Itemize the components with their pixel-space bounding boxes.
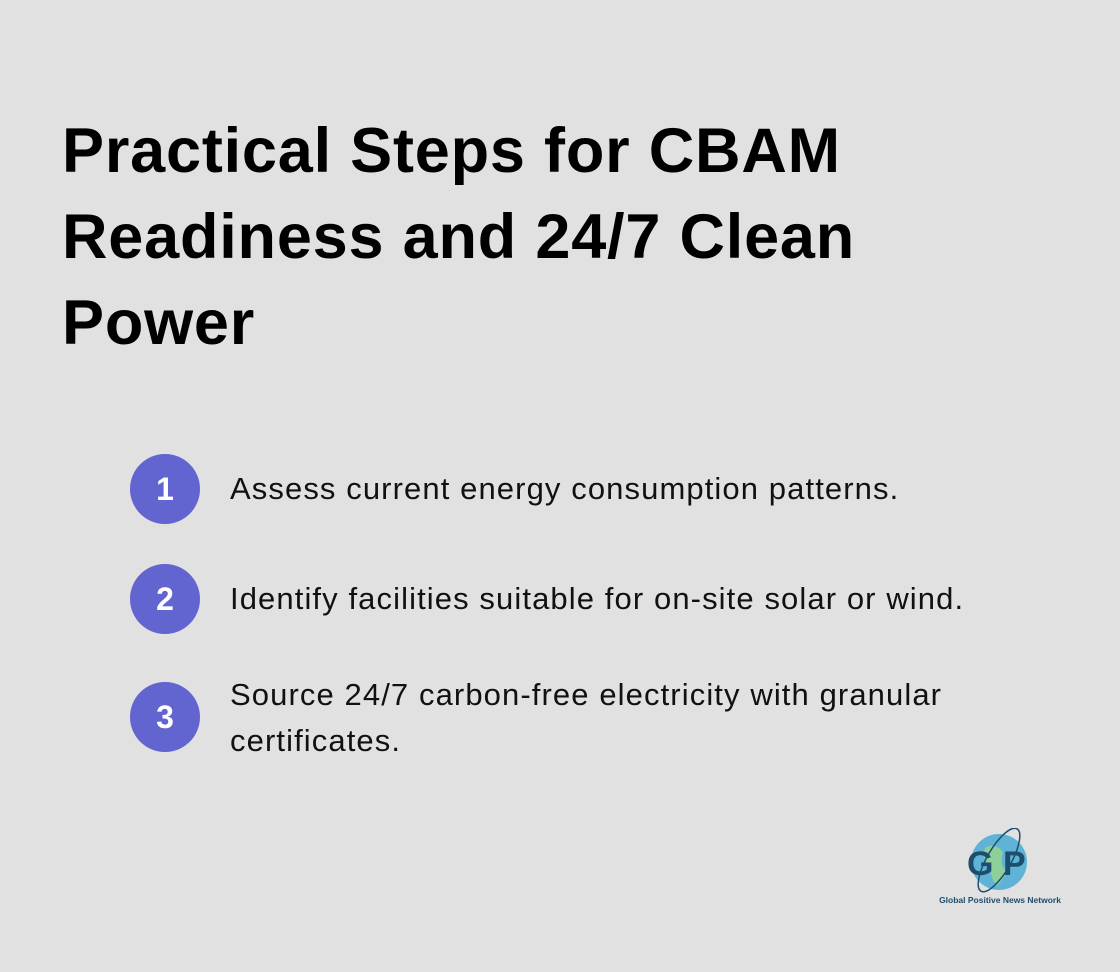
logo: Global Positive News Network xyxy=(939,895,1061,905)
step 3 xyxy=(130,677,942,758)
text 1: Assess current energy consumption patterns. xyxy=(230,471,899,506)
text 2: Identify facilities suitable for on-site solar or wind. xyxy=(230,581,964,616)
badge 1: 1 xyxy=(156,471,174,507)
logo: P xyxy=(1003,845,1026,883)
step 1 xyxy=(130,454,899,524)
badge 1 xyxy=(130,454,200,524)
title: Practical Steps for CBAM Readiness and 24/7 Clean Power xyxy=(62,116,855,358)
step 2 xyxy=(130,564,964,634)
text 3: Source 24/7 carbon-free electricity with granular certificates. xyxy=(230,677,942,758)
badge 2 xyxy=(130,564,200,634)
badge 2: 2 xyxy=(156,581,174,617)
logo xyxy=(939,828,1061,905)
logo: G xyxy=(967,845,993,883)
badge 3: 3 xyxy=(156,699,174,735)
badge 3 xyxy=(130,682,200,752)
